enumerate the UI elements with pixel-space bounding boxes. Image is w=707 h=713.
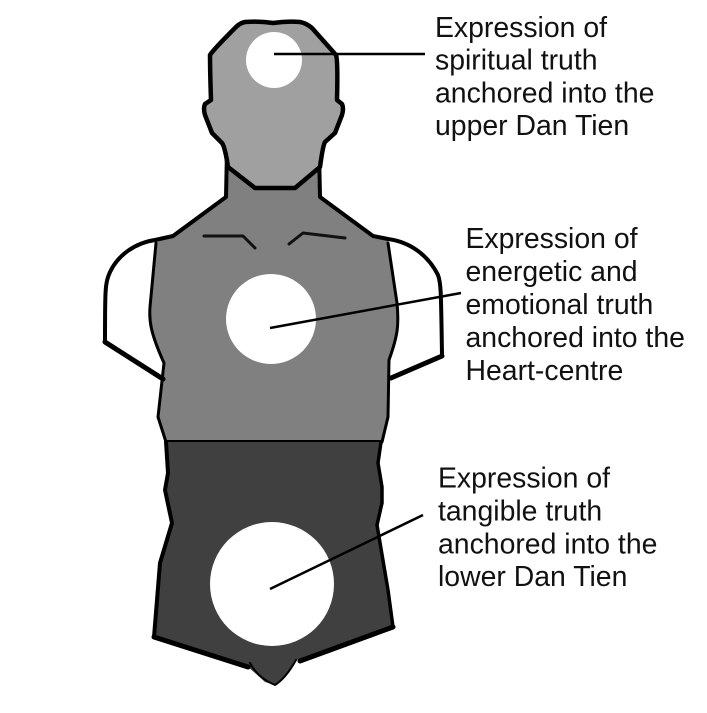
label: spiritual truth: anchored into the: [435, 78, 654, 110]
label: tangible truth: tangible truth: [438, 496, 602, 528]
leader line: upper: [274, 53, 425, 55]
label: energetic and emotional truth: emotional truth: [466, 289, 653, 321]
abdomen: [154, 441, 393, 685]
label: energetic and emotional truth: Heart-centre: [466, 355, 623, 387]
leader line: lower: [270, 515, 423, 589]
abdomen outline: [154, 441, 393, 685]
leader line: heart: [270, 293, 461, 328]
label: tangible truth: anchored into the: [438, 528, 657, 560]
label: spiritual truth: upper Dan Tien: [435, 110, 629, 142]
label: spiritual truth: spiritual truth: [435, 44, 598, 76]
label: spiritual truth: Expression of: [435, 12, 607, 44]
label: tangible truth: lower Dan Tien: [438, 561, 627, 593]
energy centre: lower Dan Tien: [210, 522, 334, 646]
label: energetic and emotional truth: energetic and: [466, 256, 638, 288]
head: [204, 22, 343, 188]
chest and neck: [150, 165, 398, 441]
energy centre: Heart-centre: [226, 274, 316, 364]
collarbones: [204, 233, 345, 248]
label: energetic and emotional truth: Expression of: [466, 223, 638, 255]
energy centre: upper Dan Tien: [246, 32, 302, 88]
label: energetic and emotional truth: anchored into the: [466, 322, 685, 354]
label: tangible truth: Expression of: [438, 462, 610, 494]
chest and arm outlines: [105, 150, 442, 442]
